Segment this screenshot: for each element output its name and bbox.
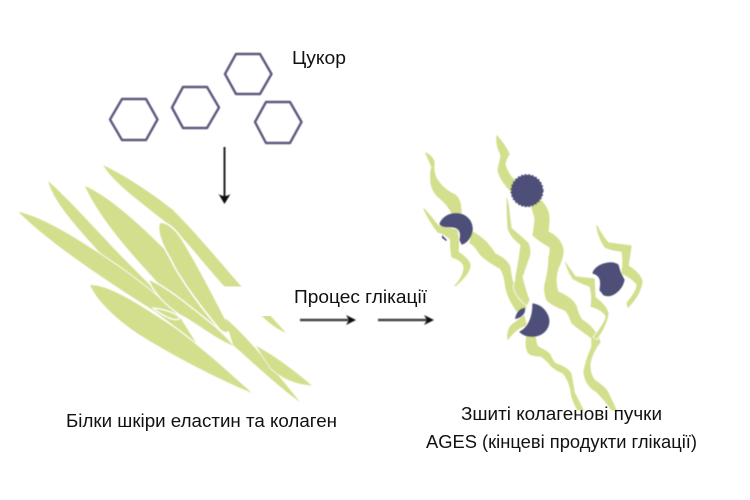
fiber [17, 211, 198, 345]
cross-link: bottom [520, 304, 549, 336]
cross-linked collagen bundles [424, 136, 642, 410]
label background [224, 286, 468, 316]
arrow: process 1 [300, 315, 356, 325]
caption: skin proteins: Білки шкіри еластин та колаген [66, 411, 337, 431]
icon: hexagon 2 [172, 87, 219, 128]
fiber [48, 181, 168, 304]
fiber [255, 345, 313, 386]
skin proteins: elastin and collagen [17, 165, 313, 402]
icon: hexagon 3 [225, 54, 272, 94]
fiber [90, 285, 252, 393]
icon: hexagon 1 [110, 99, 158, 140]
fibers [424, 136, 642, 410]
sugar molecules [110, 54, 302, 143]
caption: cross-linked bundles: Зшиті колагенові пучки [461, 404, 662, 424]
arrow: process 2 [378, 315, 434, 325]
heading: sugar: Цукор [292, 48, 346, 68]
fiber [103, 165, 286, 333]
cross-link: bottom small [515, 308, 525, 319]
cross-link: top [511, 175, 543, 206]
fiber [153, 308, 180, 320]
fiber [85, 186, 233, 347]
fiber [148, 279, 235, 347]
caption: AGES: AGES (кінцеві продукти глікації) [426, 432, 697, 452]
cross-link: right [593, 263, 624, 296]
cross-link: left small [442, 235, 447, 241]
arrow: down [218, 147, 230, 204]
fiber [225, 318, 300, 402]
cross-link: left [440, 214, 472, 244]
fiber [159, 222, 230, 333]
heading: glycation process: Процес глікації [294, 287, 427, 307]
icon: hexagon 4 [255, 102, 302, 143]
